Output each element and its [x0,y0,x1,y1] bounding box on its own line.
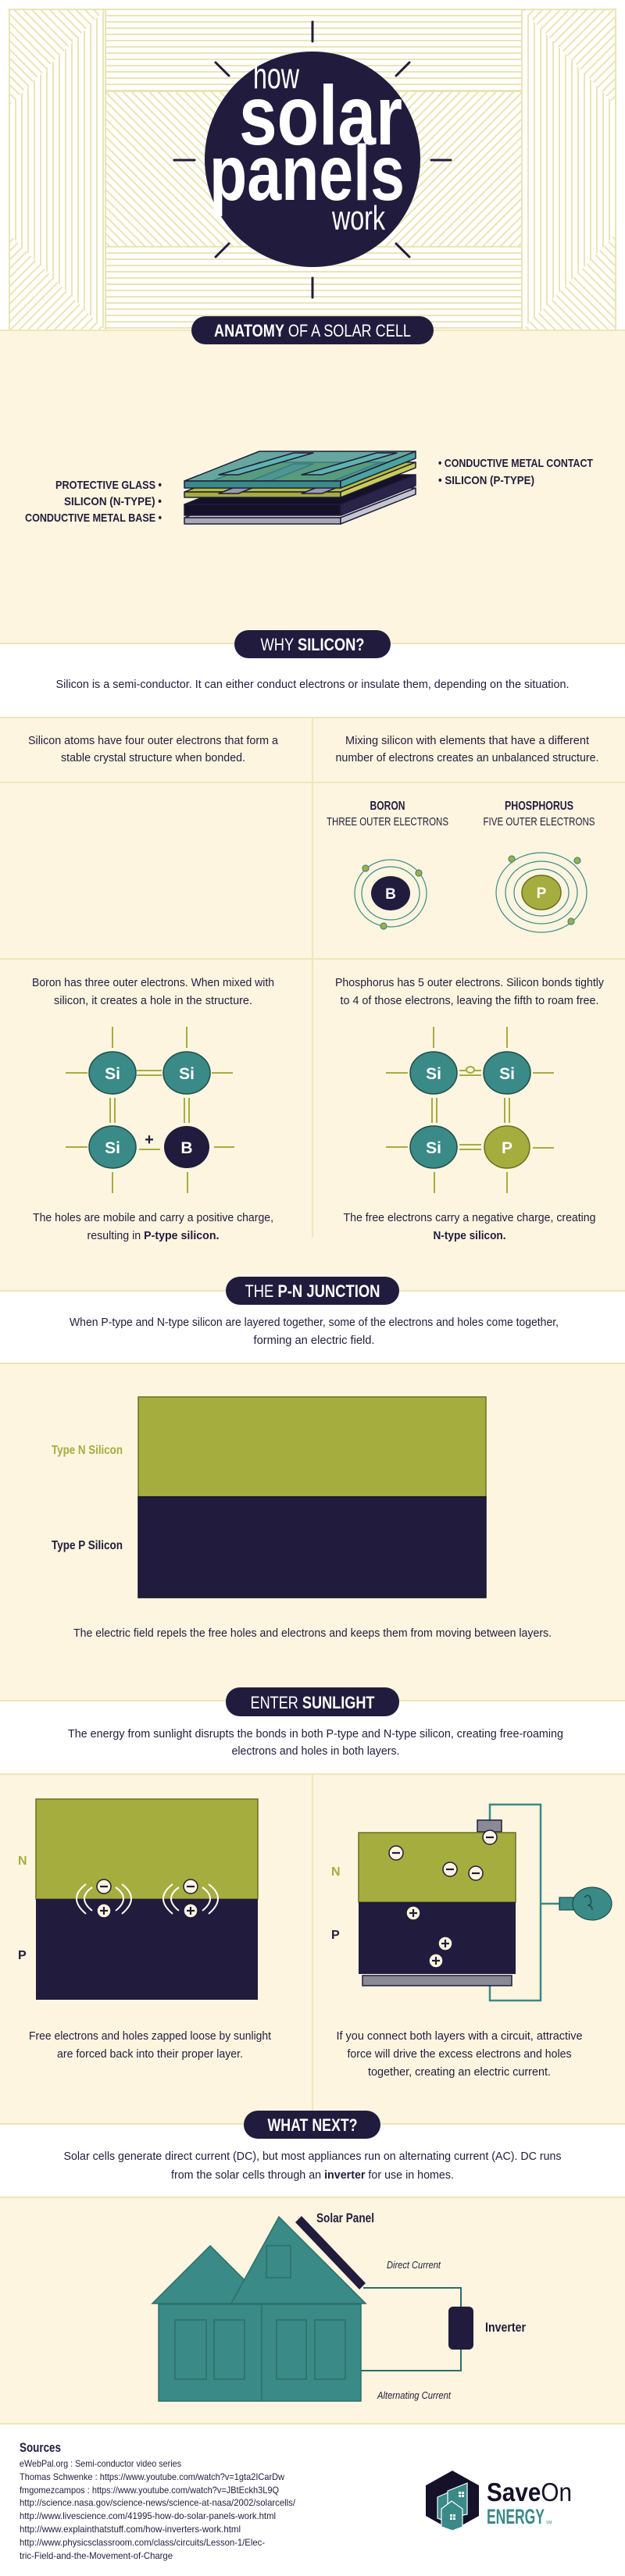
lattice: phosphorus n-type [386,1027,554,1193]
chart: p-n layers: Type N Silicon [52,1444,123,1457]
cell labels right [438,457,593,487]
text: p-type result [33,1211,273,1242]
boron label: THREE OUTER ELECTRONS [327,815,448,828]
text: mixing silicon: Mixing silicon with elements that have a different [345,734,590,747]
text: p-n intro [70,1316,559,1347]
icon: light bulb [559,1887,612,1920]
sources list: http://www.explainthatstuff.com/how-inverters-work.html [20,2524,241,2535]
diagram: circuit with bulb: N [331,1865,341,1879]
sources list: http://www.livescience.com/41995-how-do-solar-panels-work.html [20,2510,276,2521]
lattice: phosphorus n-type: Si [499,1065,515,1083]
heading: enter sunlight: ENTER SUNLIGHT [250,1693,375,1712]
sources list: Thomas Schwenke : https://www.youtube.com/watch?v=1gta2ICarDw [20,2471,284,2482]
text: boron [32,976,274,1007]
text: boron: Boron has three outer electrons. When mixed with [32,976,274,989]
illustration: house with solar panel and inverter: Solar Panel [316,2211,374,2225]
title text: solar [239,68,402,162]
text: mixing silicon: number of electrons creates an unbalanced structure. [336,751,598,764]
text: dc/ac: from the solar cells through an inverter for use in homes. [171,2168,454,2182]
diagram: circuit with bulb: P [331,1929,340,1942]
text: silicon atoms: Silicon atoms have four outer electrons that form a [28,734,279,747]
cell labels left: SILICON (N-TYPE) • [64,495,162,508]
text: mixing silicon [336,734,598,764]
heading: what next: WHAT NEXT? [267,2115,358,2135]
text: circuit current: force will drive the excess electrons and holes [347,2047,572,2061]
boron label: BORON [370,800,405,813]
icon: boron atom: B [385,886,396,903]
lattice: boron p-type: B [180,1139,193,1157]
logo: save on energy: SM [546,2521,552,2525]
text: forced back: Free electrons and holes zapped loose by sunlight [29,2029,272,2043]
heading: anatomy of a solar cell: ANATOMY OF A SOLAR CELL [214,321,411,340]
text: electric field: The electric field repels the free holes and electrons and keeps them from moving between layers. [73,1626,552,1640]
boron label [327,800,448,828]
diagram: electrons forced back: N [18,1855,27,1868]
icon: boron atom [355,860,427,929]
cell labels left: PROTECTIVE GLASS • [55,479,162,492]
lattice: boron p-type: Si [179,1065,195,1083]
sources list: eWebPal.org : Semi-conductor video series [20,2458,181,2469]
text: silicon atoms: stable crystal structure when bonded. [61,751,245,764]
lattice: boron p-type: Si [105,1065,120,1083]
logo: save on energy: ENERGY [487,2505,545,2528]
text: n-type result: N-type silicon. [433,1229,506,1242]
text: silicon atoms [28,734,279,764]
text: p-type result: resulting in P-type silicon. [88,1229,219,1242]
text: p-n intro: When P-type and N-type silicon are layered together, some of the electrons and holes come together, [70,1316,559,1329]
text: forced back [29,2029,272,2061]
text: phosphorus: to 4 of those electrons, leaving the fifth to roam free. [341,994,598,1007]
title text [209,55,405,237]
title sun circle [174,22,451,298]
sources list: tric-Field-and-the-Movement-of-Charge [20,2550,173,2561]
text: dc/ac [64,2150,561,2182]
lattice: boron p-type [66,1027,234,1193]
phosphorus label: FIVE OUTER ELECTRONS [483,815,595,828]
heading: why silicon: WHY SILICON? [261,635,364,654]
sources list: http://science.nasa.gov/science-news/science-at-nasa/2002/solarcells/ [20,2497,296,2508]
text: n-type result [344,1211,595,1242]
icon: solar panel [295,2216,366,2289]
text: boron: silicon, it creates a hole in the structure. [54,994,252,1007]
text: sunlight intro: The energy from sunlight disrupts the bonds in both P-type and N-type silicon, creating free-roaming [68,1727,563,1740]
lattice: phosphorus n-type: Si [426,1139,441,1157]
text: circuit current: If you connect both layers with a circuit, attractive [336,2029,583,2043]
cell labels right: • CONDUCTIVE METAL CONTACT [438,457,593,470]
cell labels left: CONDUCTIVE METAL BASE • [25,511,162,525]
title text: how [253,55,300,96]
chart: p-n layers [52,1397,486,1598]
heading: why silicon [234,630,391,658]
diagram: electrons forced back [18,1799,258,2000]
heading: enter sunlight [226,1687,399,1716]
diagram: circuit with bulb [331,1805,612,2001]
intro text: semi-conductor: Silicon is a semi-conductor. It can either conduct electrons or insulate them, depending on the situation. [56,678,569,691]
text: p-n intro: forming an electric field. [253,1334,375,1347]
logo: save on energy [426,2471,572,2531]
lattice: boron p-type: + [145,1131,154,1149]
heading: p-n junction: THE P-N JUNCTION [245,1281,380,1301]
chart: p-n layers: Type P Silicon [52,1539,123,1552]
sources list: fmgomezcampos : https://www.youtube.com/watch?v=JBtEckh3L9Q [20,2485,279,2496]
icon: inverter [448,2307,473,2350]
title text: work [331,199,386,237]
text: p-type result: The holes are mobile and carry a positive charge, [33,1211,273,1224]
cell labels right: • SILICON (P-TYPE) [438,474,534,487]
icon: phosphorus atom: P [537,885,547,902]
text: circuit current: together, creating an electric current. [368,2065,551,2079]
header pattern background [9,9,616,330]
logo: save on energy: SaveOn [487,2478,572,2507]
diagram: electrons forced back: P [18,1949,27,1962]
sources list: http://www.physicsclassroom.com/class/circuits/Lesson-1/Elec- [20,2537,265,2548]
phosphorus label: PHOSPHORUS [505,800,573,813]
text: sunlight intro: electrons and holes in both layers. [231,1744,400,1758]
text: circuit current [336,2029,583,2079]
phosphorus label [483,800,595,828]
text: forced back: are forced back into their proper layer. [57,2047,243,2061]
title text: panels [209,130,405,217]
icon: phosphorus atom [496,853,587,932]
lattice: phosphorus n-type: P [502,1139,512,1157]
text: phosphorus: Phosphorus has 5 outer electrons. Silicon bonds tightly [335,976,604,989]
lattice: phosphorus n-type: Si [426,1065,441,1083]
illustration: house with solar panel and inverter [152,2211,526,2401]
text: phosphorus [335,976,604,1007]
sources list: Sources [20,2440,61,2455]
heading: anatomy of a solar cell [191,316,434,344]
heading: p-n junction [226,1277,399,1305]
heading: what next [244,2111,380,2139]
cell labels left [25,479,162,525]
text: dc/ac: Solar cells generate direct current (DC), but most appliances run on alternating current (AC). DC runs [64,2150,561,2163]
illustration: house with solar panel and inverter: Direct Current [387,2259,441,2271]
text: n-type result: The free electrons carry a negative charge, creating [344,1211,595,1224]
solar cell diagram [184,451,416,524]
lattice: boron p-type: Si [105,1139,120,1157]
sources list [20,2440,296,2561]
illustration: house with solar panel and inverter: Inverter [485,2320,526,2335]
illustration: house with solar panel and inverter: Alternating Current [377,2389,452,2401]
text: sunlight intro [68,1727,563,1758]
